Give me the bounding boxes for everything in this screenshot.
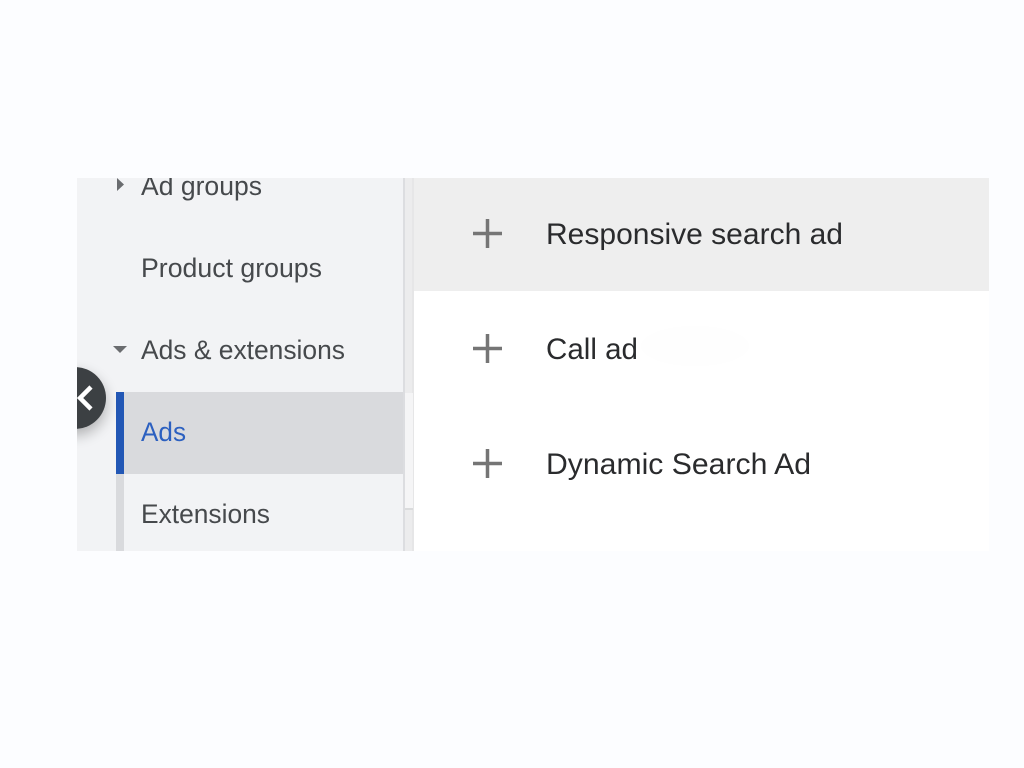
menu row: Responsive search ad bbox=[414, 178, 989, 291]
menu row: Dynamic Search Ad: Dynamic Search Ad bbox=[546, 448, 811, 481]
nav item: Ad groups bbox=[117, 178, 262, 200]
panel: campaign navigation sidebar bbox=[44, 171, 989, 551]
menu row: Call ad: Call ad bbox=[546, 333, 638, 366]
nav item: Ads (selected) bbox=[116, 392, 403, 474]
nav item: Ads (selected): Ads bbox=[141, 417, 186, 447]
nav item: Ads & extensions: Ads & extensions bbox=[141, 335, 345, 365]
panel: ad type menu bbox=[414, 178, 989, 480]
nav item: Extensions bbox=[116, 474, 270, 551]
icon: plus bbox=[473, 219, 502, 248]
collapse button with chevron bbox=[77, 366, 113, 442]
menu row: Call ad bbox=[473, 334, 636, 363]
icon: plus bbox=[473, 334, 502, 363]
faint smudge bbox=[641, 326, 749, 366]
sidebar scrollbar bbox=[403, 178, 414, 551]
nav item: Ad groups: Ad groups bbox=[141, 171, 262, 201]
menu row: Responsive search ad: Responsive search ad bbox=[546, 218, 843, 251]
nav item: Ads & extensions bbox=[113, 340, 344, 360]
icon: plus bbox=[473, 449, 502, 478]
nav item: Extensions: Extensions bbox=[141, 499, 270, 529]
nav item: Product groups: Product groups bbox=[141, 253, 322, 283]
